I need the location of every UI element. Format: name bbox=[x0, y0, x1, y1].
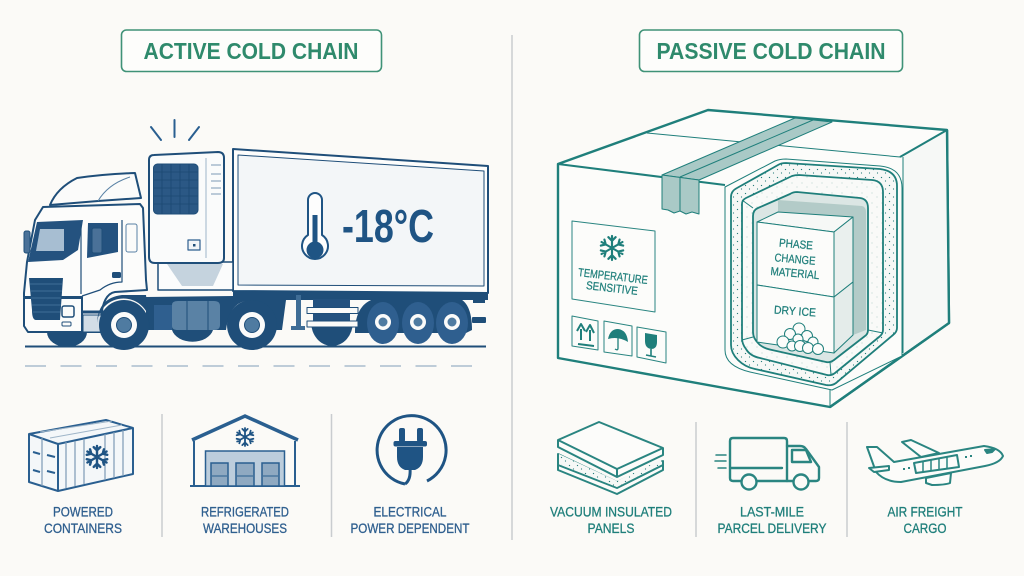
panel: vacuum insulated panels bbox=[550, 422, 672, 536]
label bbox=[350, 504, 470, 536]
label: CARGO bbox=[904, 521, 946, 536]
panel: refrigerated warehouses bbox=[190, 416, 300, 536]
dry ice pellets bbox=[777, 323, 824, 354]
front wheel arch bbox=[97, 295, 150, 330]
panel: air freight cargo bbox=[867, 440, 1003, 536]
insulation cutaway bbox=[725, 159, 902, 407]
center divider bbox=[511, 35, 513, 540]
label: POWERED bbox=[53, 504, 113, 520]
label: PANELS bbox=[588, 521, 634, 536]
icon: thermometer bbox=[302, 193, 328, 259]
label: ELECTRICAL bbox=[374, 504, 447, 520]
box shell bbox=[558, 110, 949, 407]
label bbox=[718, 504, 826, 536]
label: WAREHOUSES bbox=[203, 521, 287, 536]
panel: last-mile parcel delivery bbox=[715, 438, 826, 536]
block: phase change material bbox=[757, 212, 853, 297]
divider bbox=[330, 414, 332, 537]
icon: shipping container bbox=[29, 420, 133, 491]
handling icon: keep dry bbox=[604, 321, 632, 356]
inner cavity bbox=[753, 192, 868, 362]
refrigerated truck bbox=[24, 149, 488, 366]
block: phase change material: CHANGE bbox=[774, 252, 816, 268]
divider bbox=[695, 422, 697, 537]
label: AIR FREIGHT bbox=[888, 504, 962, 520]
heading: active cold chain: ACTIVE COLD CHAIN bbox=[144, 38, 358, 64]
label: REFRIGERATED bbox=[201, 504, 289, 520]
temperature sensitive label: TEMPERATURE bbox=[577, 267, 649, 287]
heading: passive cold chain: PASSIVE COLD CHAIN bbox=[656, 38, 886, 64]
icon: cargo airplane bbox=[867, 440, 1003, 485]
label: VACUUM INSULATED bbox=[550, 504, 672, 520]
heading: active cold chain bbox=[122, 30, 382, 72]
label bbox=[201, 504, 289, 536]
block: phase change material: PHASE bbox=[778, 238, 814, 252]
packing tape bbox=[662, 118, 832, 214]
icon: warehouse bbox=[190, 416, 300, 486]
panel: powered containers bbox=[29, 420, 133, 536]
icon: alert rays above cooling unit bbox=[151, 120, 199, 140]
label bbox=[44, 504, 122, 536]
hidden wheels bbox=[47, 322, 353, 347]
block: dry ice: DRY ICE bbox=[774, 305, 817, 319]
heading: passive cold chain bbox=[640, 30, 902, 72]
outer dotted insulation bbox=[731, 163, 897, 385]
divider bbox=[161, 414, 163, 537]
tractor cab bbox=[24, 173, 150, 332]
label: CONTAINERS bbox=[44, 521, 122, 536]
icon: plug bbox=[377, 416, 446, 484]
inner foam layer bbox=[742, 175, 883, 375]
temperature sensitive label: SENSITIVE bbox=[585, 280, 639, 298]
road bbox=[25, 346, 486, 366]
insulated parcel box bbox=[558, 110, 949, 407]
handling icon: fragile bbox=[637, 327, 666, 363]
block: phase change material: MATERIAL bbox=[770, 266, 820, 282]
label: PARCEL DELIVERY bbox=[718, 521, 826, 536]
label bbox=[888, 504, 962, 536]
label bbox=[550, 504, 672, 536]
temperature reading: -18°C bbox=[342, 200, 434, 252]
label: LAST-MILE bbox=[740, 504, 804, 520]
panel: electrical power dependent bbox=[350, 416, 470, 536]
cooling unit bbox=[149, 152, 233, 290]
block: dry ice bbox=[757, 282, 853, 354]
temperature sensitive label bbox=[572, 221, 655, 312]
label: POWER DEPENDENT bbox=[350, 521, 470, 536]
icon: stacked panels bbox=[558, 422, 663, 494]
trailer body bbox=[233, 149, 488, 293]
divider bbox=[846, 422, 848, 537]
wheels bbox=[99, 300, 468, 350]
icon: delivery van bbox=[715, 438, 819, 490]
handling icon: this way up bbox=[572, 316, 598, 350]
chassis bbox=[146, 291, 488, 333]
